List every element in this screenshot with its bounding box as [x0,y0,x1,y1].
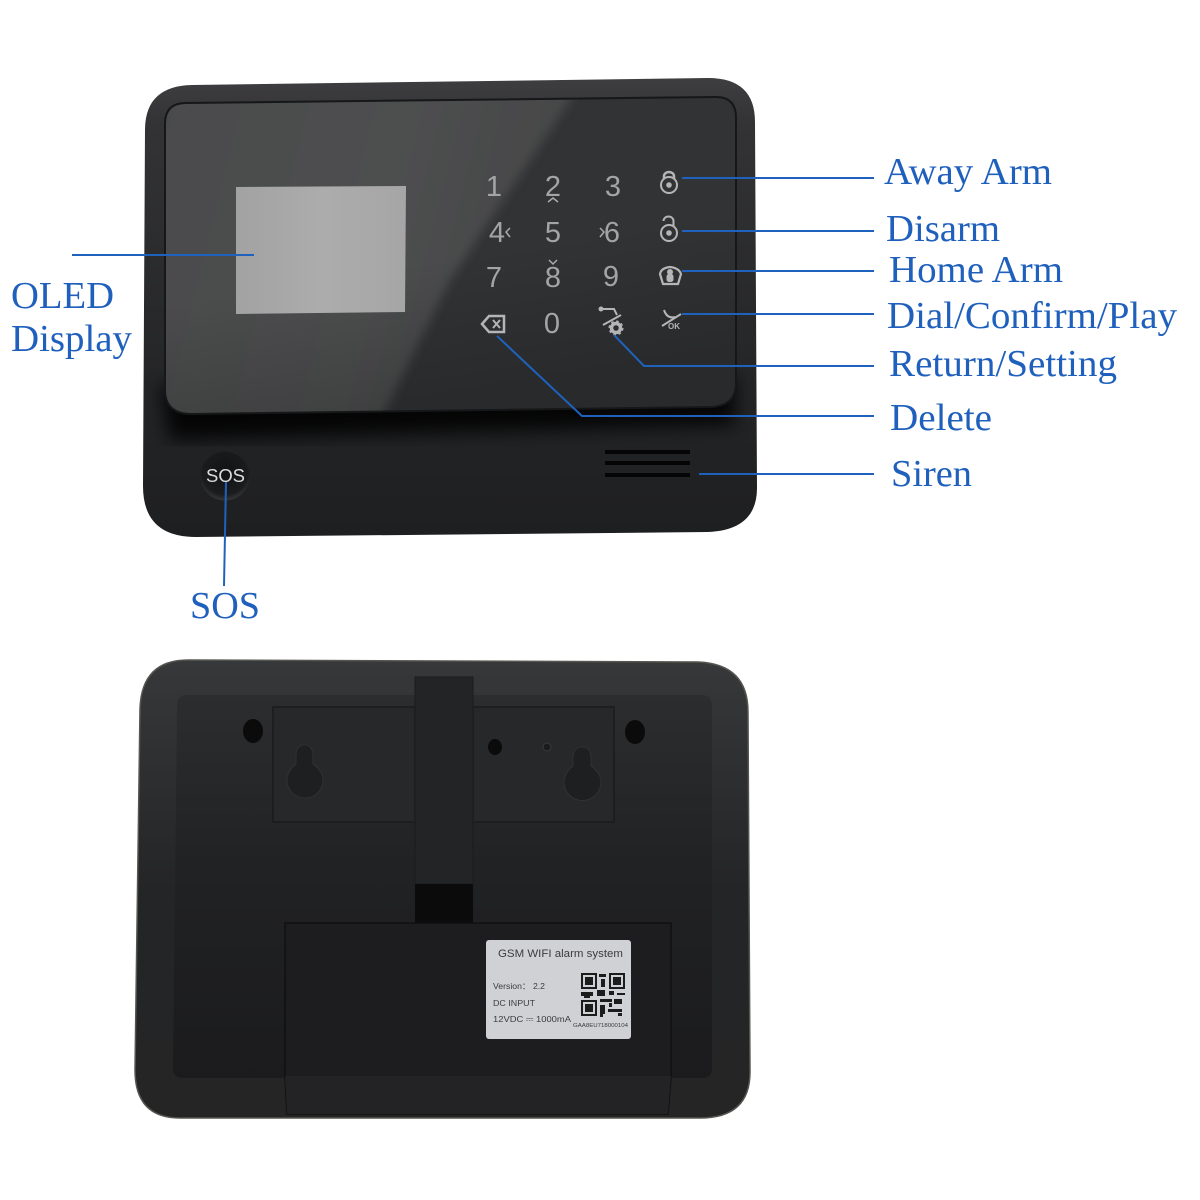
callout labels: Siren [891,453,972,495]
icon: away arm lock [661,172,677,193]
SOS button: SOS [206,466,245,486]
callout labels: Display [11,318,132,360]
keypad digits: 0 [544,308,560,340]
callout labels: Disarm [886,208,1000,250]
screw holes [243,719,645,755]
keypad digits: 8 [545,262,561,294]
product label sticker: GAA8EU718000104 [573,1023,628,1029]
keypad digits [486,171,621,340]
keypad digits: 1 [486,171,502,203]
icon: return and setting [600,308,622,334]
rear inner plate [173,695,712,1078]
left keyhole [287,745,323,798]
right keyhole [564,747,601,800]
callout lines [72,178,874,586]
product label sticker: GSM WIFI alarm system [498,948,623,960]
keypad digits: 4 [489,217,505,249]
SOS button [200,452,250,500]
product label sticker: 12VDC ⎓ 1000mA [493,1014,571,1024]
callout labels: Return/Setting [889,343,1117,385]
cover lip [285,1076,671,1114]
keypad digits: 7 [486,262,502,294]
keypad digits: 2 [545,171,561,203]
callout labels: Home Arm [889,249,1063,291]
touch screen glass [164,96,737,415]
icon: home arm [660,267,681,284]
siren speaker grille [605,450,690,477]
right mount recess [473,707,614,822]
product label sticker: DC INPUT [493,998,535,1008]
keypad digits: 6 [604,217,620,249]
battery cover [285,923,671,1114]
rear body [135,660,750,1118]
rear panel device [135,660,750,1118]
keypad arrows [506,198,604,264]
callout labels [11,151,1177,627]
left mount recess [273,707,415,822]
product label sticker: Version： 2.2 [493,981,545,991]
stand slot [415,884,473,924]
icon: delete backspace [482,316,504,332]
callout labels: SOS [190,585,260,627]
device body [143,78,757,537]
keypad digits: 9 [603,261,619,293]
callout labels: OLED [11,275,114,317]
stand channel [415,677,473,884]
callout labels: Delete [890,397,992,439]
callout labels: Dial/Confirm/Play [887,295,1177,337]
product label sticker [486,940,631,1039]
QR code [581,973,625,1017]
keypad digits: 3 [605,171,621,203]
shadow under glass [160,375,735,440]
OLED display screen [236,186,406,314]
icon: disarm lock [661,216,677,241]
callout labels: Away Arm [884,151,1052,193]
keypad digits: 5 [545,217,561,249]
icon: dial confirm [662,310,681,331]
front panel device [143,78,757,537]
icon: dial confirm: OK [668,322,680,331]
